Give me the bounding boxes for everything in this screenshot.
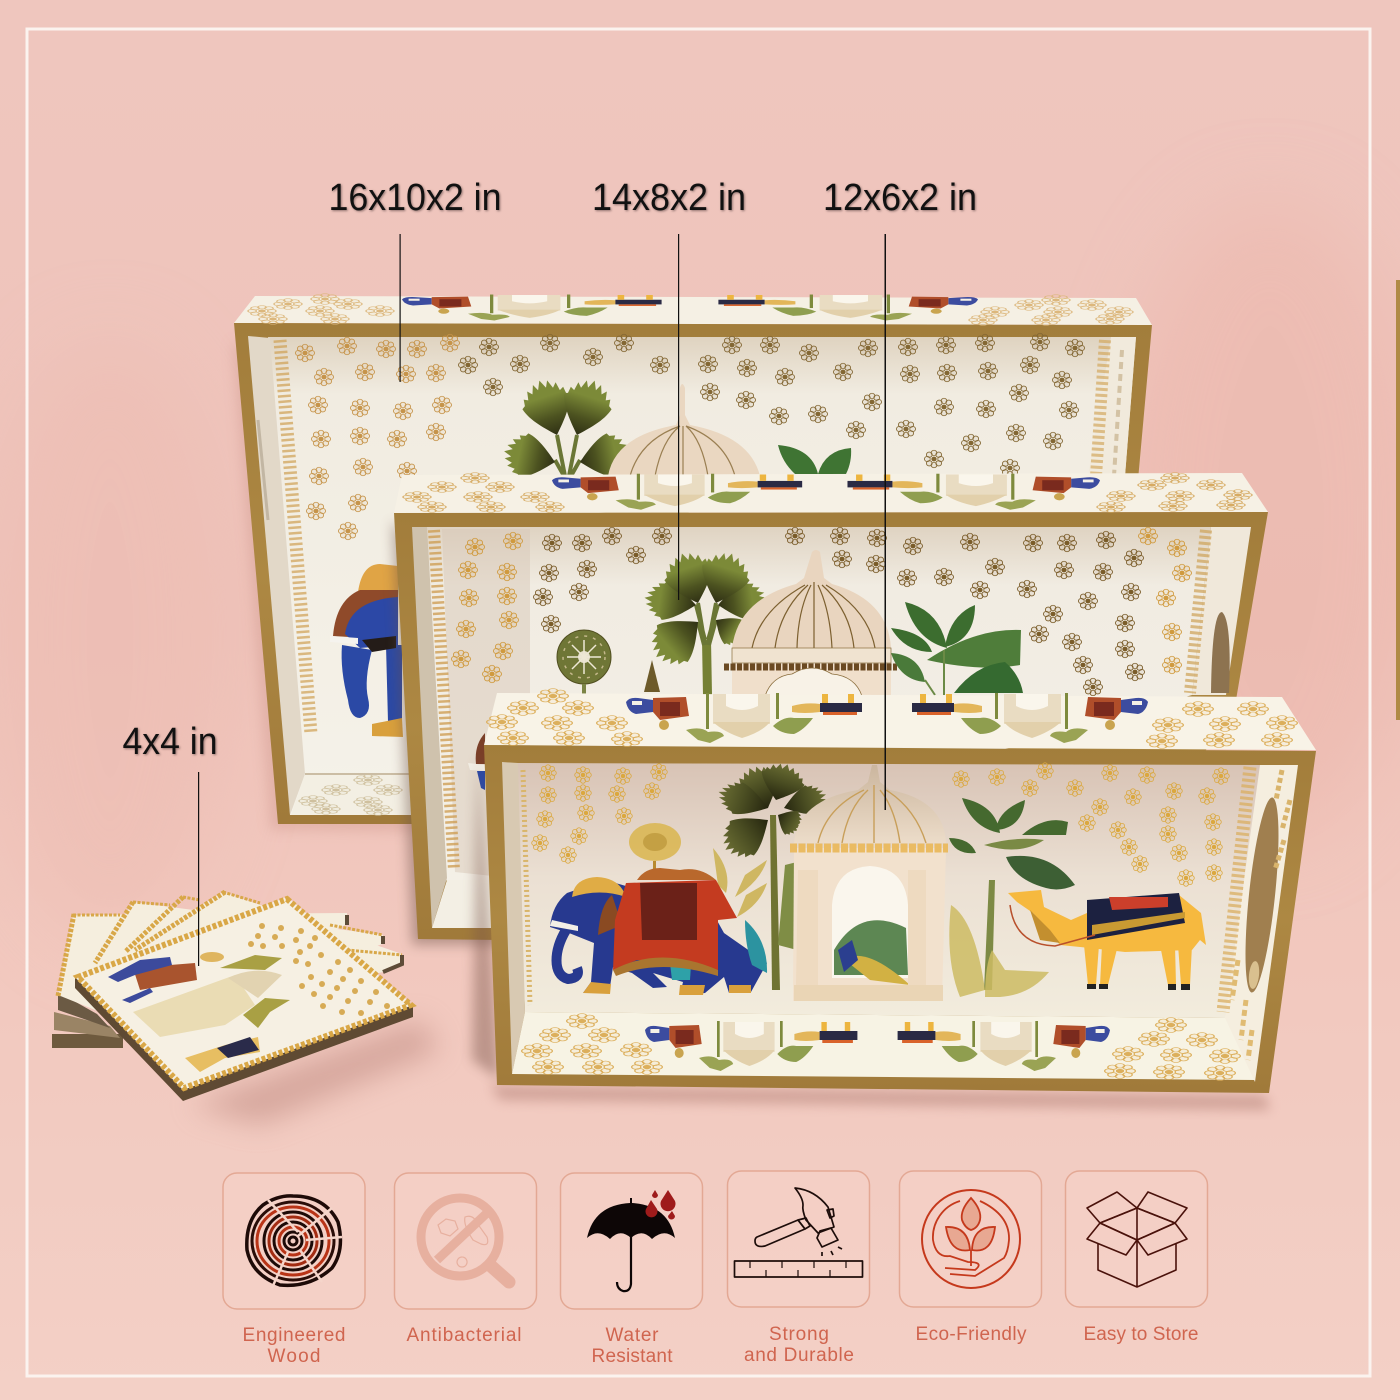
side elephant [468,733,485,790]
tree print [220,955,290,1028]
feature: water resistant: Resistant [592,1346,673,1367]
floor [432,880,500,928]
icon: hammer and ruler [734,1188,862,1277]
feature: strong and durable [728,1171,870,1366]
feature: easy to store [1066,1171,1208,1345]
shadow [392,520,500,945]
left wall [412,527,447,928]
star field gold [451,527,1192,683]
elephant print [108,957,197,1003]
floor stars [299,775,402,815]
rim stars [248,294,1133,325]
icon: magnifier [421,1198,509,1282]
handle hole [1211,612,1230,693]
flower [557,630,660,694]
palm [499,373,636,484]
right wall [1225,765,1298,1082]
back wall [515,763,1262,1018]
feature: engineered wood: Wood [268,1346,320,1367]
shadow [490,1085,1270,1110]
back wall [425,527,1211,895]
floor [512,1012,1255,1080]
icon: plant in hand [922,1190,1020,1288]
feature: water resistant [560,1173,702,1367]
frieze left [280,340,311,734]
camel print [185,1037,260,1072]
camel [1008,890,1206,990]
front coaster face [75,897,413,1090]
gold frame [234,323,1152,824]
rim motifs [552,474,802,510]
floor stars [522,1014,1240,1080]
caption: Water [606,1325,659,1346]
front coaster edge [75,977,413,1101]
medium tray [392,473,1268,945]
rim stars [403,473,1252,512]
banana tree [949,798,1075,990]
rim top surface [234,296,1152,325]
rim motifs [626,693,862,743]
elephant [550,868,767,995]
rim top surface [484,693,1316,750]
right wall [1192,527,1251,695]
star field dark [458,333,1085,477]
feature: antibacterial [394,1173,536,1346]
small tray [472,689,1316,1110]
dots [248,923,390,1016]
leaves [778,445,851,474]
feature: strong and durable: and Durable [744,1345,854,1366]
wall stars [532,763,1229,886]
dimension label: 12x6x2 in: 12x6x2 in [823,177,977,219]
gold flower [629,823,681,875]
dimension label: 14x8x2 in: 14x8x2 in [592,177,746,219]
caption: Strong [769,1324,829,1345]
left wall [502,762,525,1074]
pavilion [724,550,897,696]
icon: umbrella [587,1190,675,1291]
rim motifs [402,295,662,321]
star field left [295,334,460,540]
caption: Easy to Store [1084,1324,1198,1345]
pavilion print [133,975,255,1037]
banana tree [891,602,1023,695]
dimension label: 4x4 in: 4x4 in [122,721,218,763]
feature: engineered wood [223,1173,365,1367]
dimension label: 16x10x2 in: 16x10x2 in [328,177,502,219]
wheat and fern [713,848,767,917]
floor motifs [645,1021,857,1071]
left wall [248,336,305,815]
rim top surface [394,473,1268,513]
reflected shading [442,529,530,880]
gold frame [394,512,1268,940]
dome [608,384,760,476]
caption: Antibacterial [406,1325,522,1346]
right wall [1088,337,1136,476]
coasters [52,892,440,1125]
palm [641,546,770,695]
icon: wood rings [247,1196,342,1288]
cast shadow [190,1020,440,1125]
shrubs [949,905,1049,997]
back wall [268,337,1136,815]
back coasters [58,913,347,1020]
shadow [232,340,420,832]
gold frame [484,745,1316,1093]
feature: eco-friendly [900,1171,1042,1345]
large tray [232,294,1152,832]
handle hole [1239,796,1285,994]
floor [291,774,420,815]
palm [713,757,831,990]
stacked edges [52,1034,123,1048]
rim stars [487,689,1297,748]
icon: open box [1087,1192,1187,1287]
star field dark [533,527,1145,696]
elephant [330,564,403,737]
pavilion [790,765,948,1001]
caption: Engineered [242,1325,346,1346]
caption: Eco-Friendly [916,1324,1027,1345]
frieze [434,530,454,870]
